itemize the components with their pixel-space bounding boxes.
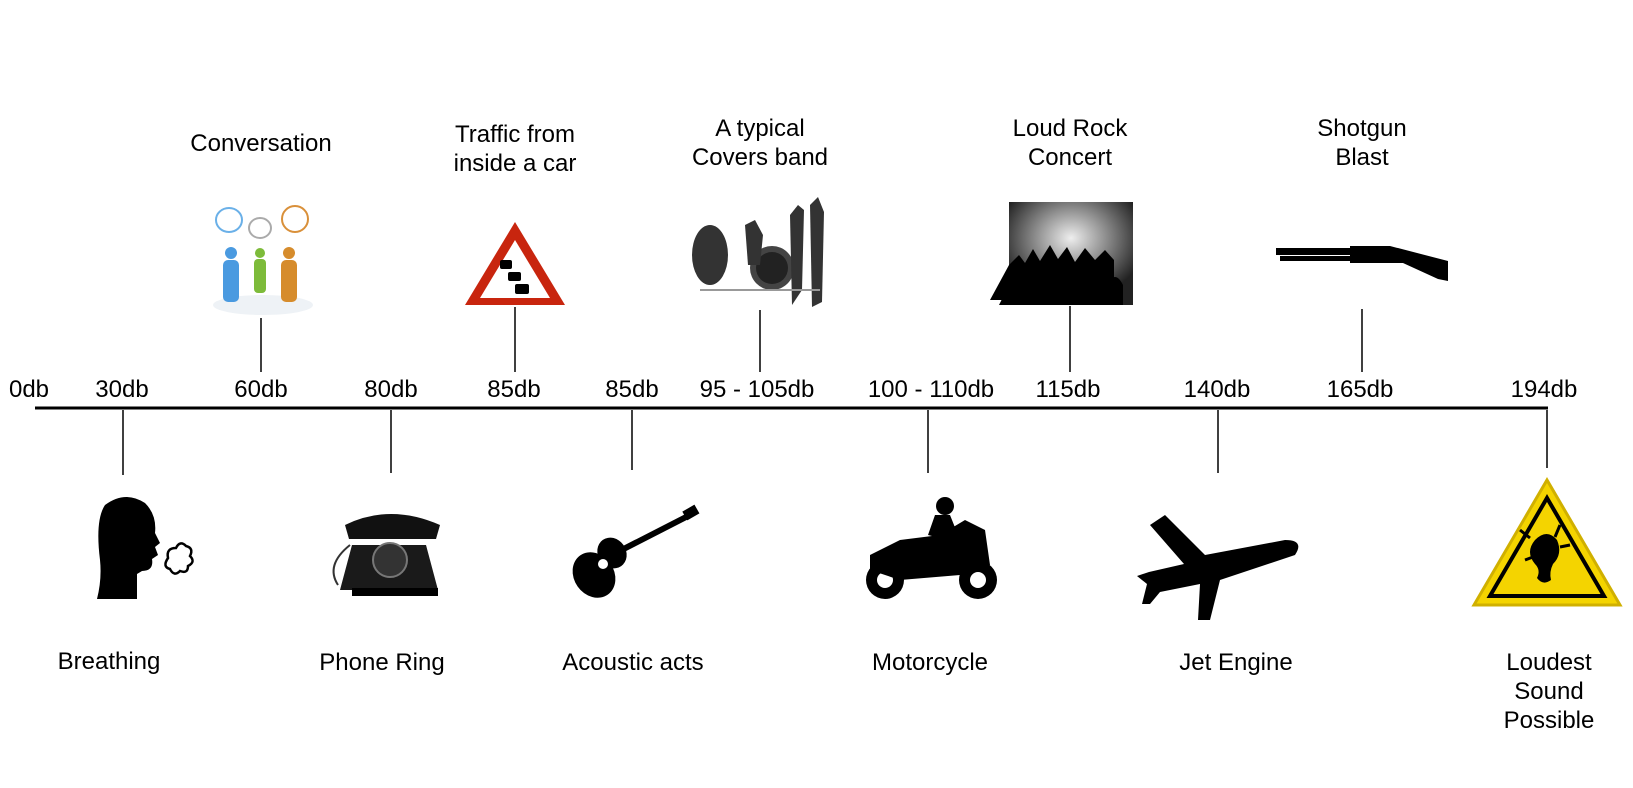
decibel labels: 140db bbox=[1184, 376, 1250, 403]
top titles: A typical bbox=[715, 115, 805, 142]
decibel labels: 0db bbox=[9, 376, 49, 403]
bottom titles: Jet Engine bbox=[1179, 649, 1293, 676]
top titles: inside a car bbox=[454, 150, 576, 177]
decibel labels: 85db bbox=[487, 376, 541, 403]
bottom titles: Sound bbox=[1514, 678, 1584, 705]
decibel labels: 194db bbox=[1511, 376, 1577, 403]
bottom titles: Acoustic acts bbox=[562, 649, 704, 676]
icon: hearing warning sign bbox=[1474, 480, 1620, 605]
decibel labels: 115db bbox=[1036, 376, 1100, 403]
decibel labels: 60db bbox=[234, 376, 288, 403]
top titles: Covers band bbox=[692, 144, 828, 171]
bottom titles: Loudest bbox=[1506, 649, 1592, 676]
icon: covers band bbox=[692, 197, 824, 307]
top titles: Concert bbox=[1028, 144, 1112, 171]
decibel labels: 80db bbox=[364, 376, 418, 403]
bottom titles: Possible bbox=[1504, 707, 1594, 734]
icon: rock concert bbox=[990, 202, 1133, 305]
top titles: Shotgun bbox=[1317, 115, 1407, 142]
decibel labels bbox=[9, 376, 1577, 403]
bottom titles: Phone Ring bbox=[319, 649, 445, 676]
icon: acoustic guitar bbox=[564, 505, 699, 606]
timeline axis bbox=[35, 306, 1548, 475]
top titles: Conversation bbox=[190, 130, 332, 157]
decibel labels: 85db bbox=[605, 376, 659, 403]
top titles: Traffic from bbox=[455, 121, 575, 148]
decibel labels: 95 - 105db bbox=[700, 376, 814, 403]
icon: breathing head bbox=[97, 497, 193, 599]
decibel labels: 30db bbox=[95, 376, 149, 403]
icon: traffic warning sign bbox=[465, 222, 565, 305]
bottom titles bbox=[58, 648, 1594, 734]
decibel labels: 100 - 110db bbox=[868, 376, 994, 403]
icon: conversation people bbox=[213, 206, 313, 315]
icon: rotary phone bbox=[334, 514, 440, 596]
icon: shotgun bbox=[1276, 246, 1448, 281]
icon: jet plane bbox=[1137, 515, 1298, 620]
bottom titles: Motorcycle bbox=[872, 649, 988, 676]
top titles: Blast bbox=[1335, 144, 1389, 171]
top titles: Loud Rock bbox=[1013, 115, 1128, 142]
decibel labels: 165db bbox=[1327, 376, 1393, 403]
icon: motorcycle bbox=[866, 497, 997, 599]
bottom titles: Breathing bbox=[58, 648, 160, 675]
top titles bbox=[190, 115, 1407, 177]
